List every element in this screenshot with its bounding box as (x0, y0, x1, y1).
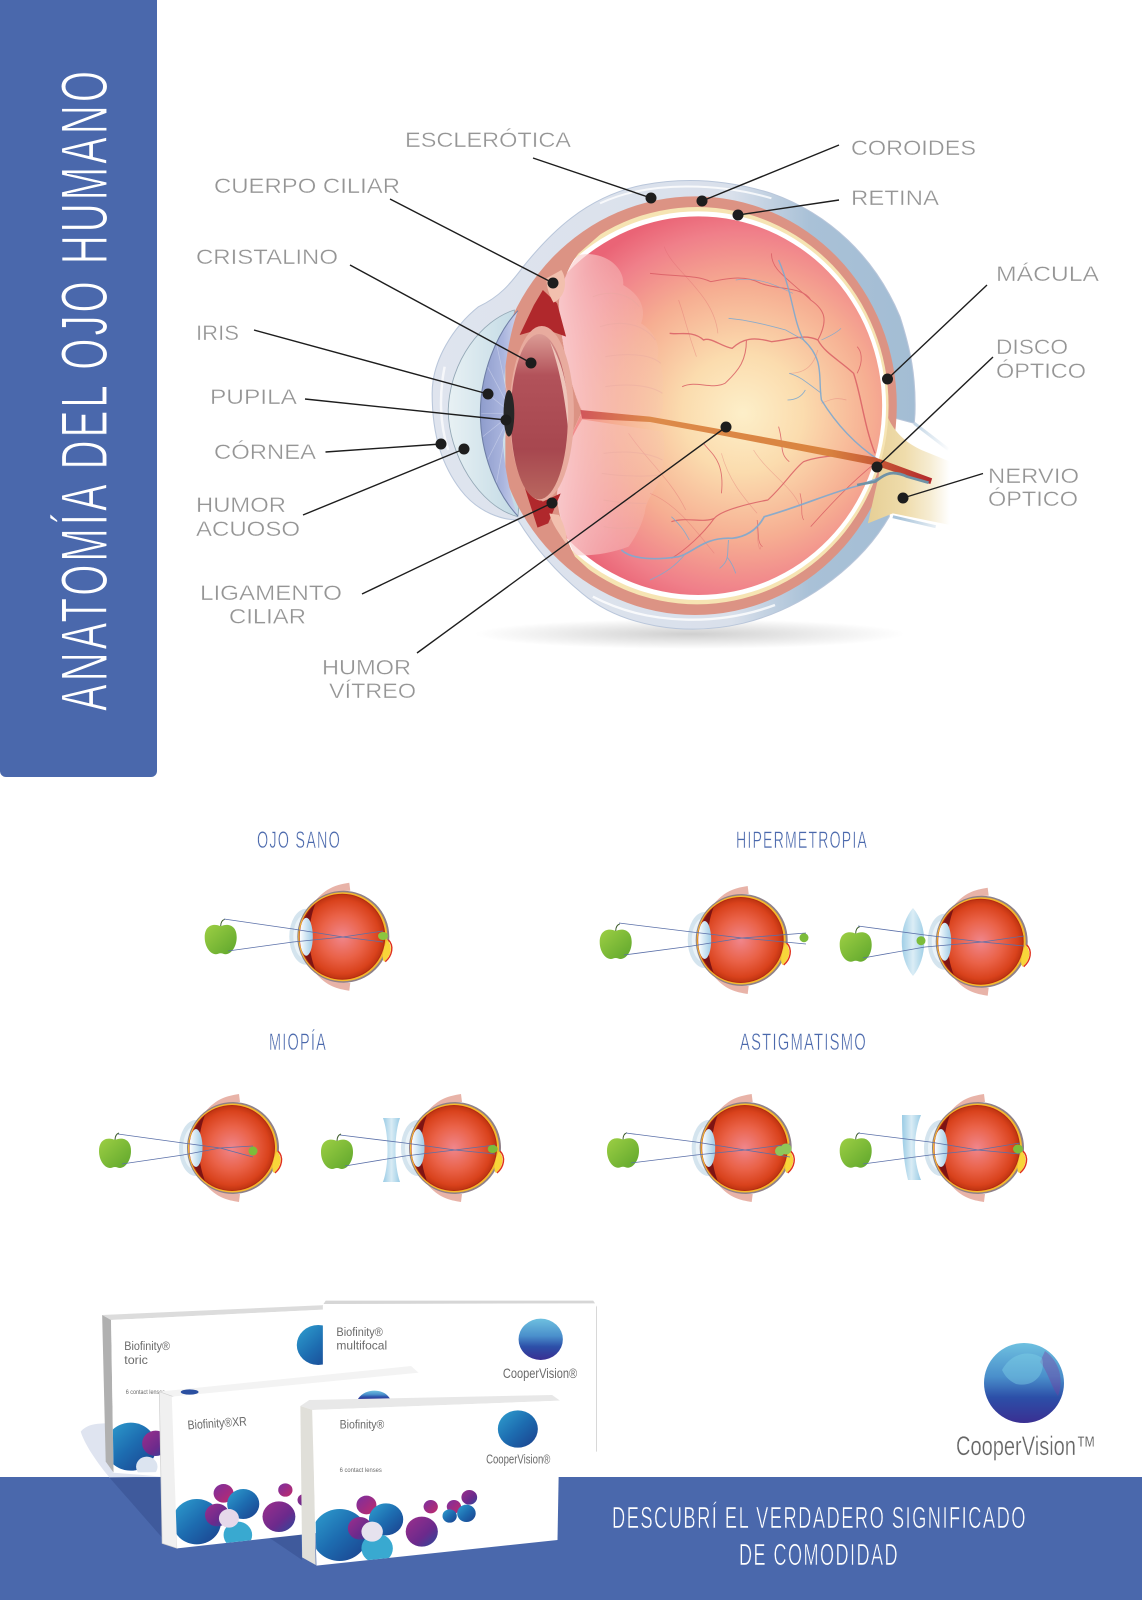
box: biofinity toric (102, 1305, 340, 1477)
marker dots (436, 192, 908, 508)
focus image (488, 1145, 498, 1153)
red vessels (650, 253, 875, 558)
anatomy labels: PUPILA (210, 385, 298, 409)
focus image (248, 1146, 258, 1156)
eye shadow (475, 619, 905, 649)
box: biofinity: Biofinity® (340, 1418, 384, 1432)
apple (840, 1133, 872, 1168)
light rays (340, 1135, 495, 1166)
panel: astigmatismo (607, 1029, 1027, 1202)
focus image (1013, 1144, 1023, 1154)
aqueous humor and cornea (448, 310, 529, 517)
main eye anatomy illustration (432, 180, 950, 629)
eye diagram: uncorrected (692, 1094, 794, 1202)
logo wordmark: CooperVision™ (956, 1431, 1096, 1461)
sclera (432, 180, 915, 629)
anatomy labels (196, 127, 1100, 703)
panel: title sidebar (0, 0, 157, 777)
anatomy labels: MÁCULA (996, 261, 1100, 286)
logo sphere (984, 1343, 1064, 1423)
anatomy labels: DISCO (996, 335, 1068, 359)
apple (840, 927, 872, 962)
apple (321, 1134, 353, 1169)
box: biofinity: 6 contact lenses (340, 1467, 382, 1474)
anatomy labels: ÓPTICO (988, 486, 1078, 511)
iris (480, 311, 518, 516)
focus image (916, 936, 926, 945)
eye diagram: corrected (924, 1094, 1027, 1202)
box: biofinity multifocal: Biofinity® (336, 1325, 383, 1339)
red ciliary tissue (520, 290, 566, 337)
box: biofinity multifocal: CooperVision® (503, 1366, 577, 1382)
footer slogan: DE COMODIDAD (739, 1537, 899, 1572)
light rays (619, 923, 806, 955)
anatomy labels: ESCLERÓTICA (405, 127, 572, 152)
light rays (858, 926, 1024, 958)
box: biofinity xr: Biofinity®XR (187, 1414, 247, 1432)
vitreous humor (557, 216, 882, 595)
convex lens (902, 908, 924, 976)
anatomy labels: COROIDES (851, 136, 976, 160)
box shadow (81, 1423, 163, 1477)
anatomy labels: IRIS (196, 321, 239, 345)
box: biofinity toric: 6 contact lenses (126, 1389, 165, 1396)
box: biofinity toric: toric (124, 1353, 148, 1367)
box: biofinity toric: Biofinity® (124, 1339, 170, 1353)
box: biofinity xr (159, 1366, 419, 1548)
blue vessels (621, 260, 879, 580)
anatomy labels: ACUOSO (196, 517, 300, 541)
optic nerve vessels (857, 473, 929, 485)
apple (205, 919, 237, 954)
apple (99, 1133, 131, 1168)
anatomy labels: CUERPO CILIAR (214, 174, 400, 198)
crystalline lens (510, 326, 574, 501)
choroid (493, 196, 897, 615)
eye diagram: uncorrected (179, 1094, 282, 1202)
leader lines (254, 145, 993, 653)
anatomy labels: CÓRNEA (214, 439, 317, 464)
focus image (378, 932, 388, 940)
anatomy labels: HUMOR (322, 656, 411, 680)
focus image (775, 1144, 792, 1156)
panel: ojo sano (205, 827, 392, 991)
eye diagram: healthy (289, 883, 392, 991)
focus image (800, 933, 808, 942)
anatomy labels: CILIAR (229, 604, 306, 628)
retina (557, 207, 889, 604)
heading: ojo sano: OJO SANO (257, 827, 341, 854)
footer slogan (612, 1500, 1027, 1572)
box: biofinity multifocal: multifocal (336, 1339, 387, 1352)
pupil (504, 390, 514, 437)
anatomy labels: NERVIO (988, 464, 1079, 488)
anatomy labels: CRISTALINO (196, 245, 338, 269)
vessels faint (629, 247, 846, 553)
anatomy labels: ÓPTICO (996, 358, 1086, 383)
eye diagram: uncorrected (688, 886, 790, 994)
anatomy labels: HUMOR (196, 493, 286, 517)
panel: miopia (99, 1029, 504, 1202)
panel: hipermetropia (600, 827, 1030, 996)
apple (607, 1133, 639, 1168)
heading: miopia: MIOPÍA (269, 1029, 327, 1056)
product boxes (81, 1301, 597, 1566)
eye diagram: corrected (401, 1094, 504, 1202)
anatomy labels: LIGAMENTO (200, 581, 342, 605)
light rays (626, 1133, 790, 1163)
astigmatism lens (902, 1115, 921, 1180)
box: biofinity (300, 1395, 560, 1566)
hyaloid canal (580, 410, 932, 484)
ciliary muscle folds (557, 254, 664, 555)
concave lens (383, 1118, 400, 1182)
ciliary body (546, 270, 565, 303)
apple (600, 924, 632, 959)
light rays (118, 1134, 253, 1164)
box: biofinity: CooperVision® (486, 1451, 550, 1466)
heading: hipermetropia: HIPERMETROPIA (736, 827, 868, 854)
anatomy labels: RETINA (851, 186, 940, 210)
heading: astigmatismo: ASTIGMATISMO (740, 1029, 867, 1056)
footer band (0, 1477, 1142, 1600)
light rays (224, 919, 383, 951)
anatomy labels: VÍTREO (329, 678, 416, 703)
light rays (858, 1133, 1020, 1164)
eye diagram: corrected (928, 888, 1030, 996)
box: biofinity multifocal (322, 1301, 597, 1454)
optic nerve (868, 417, 950, 527)
logo: coopervision (956, 1343, 1096, 1461)
